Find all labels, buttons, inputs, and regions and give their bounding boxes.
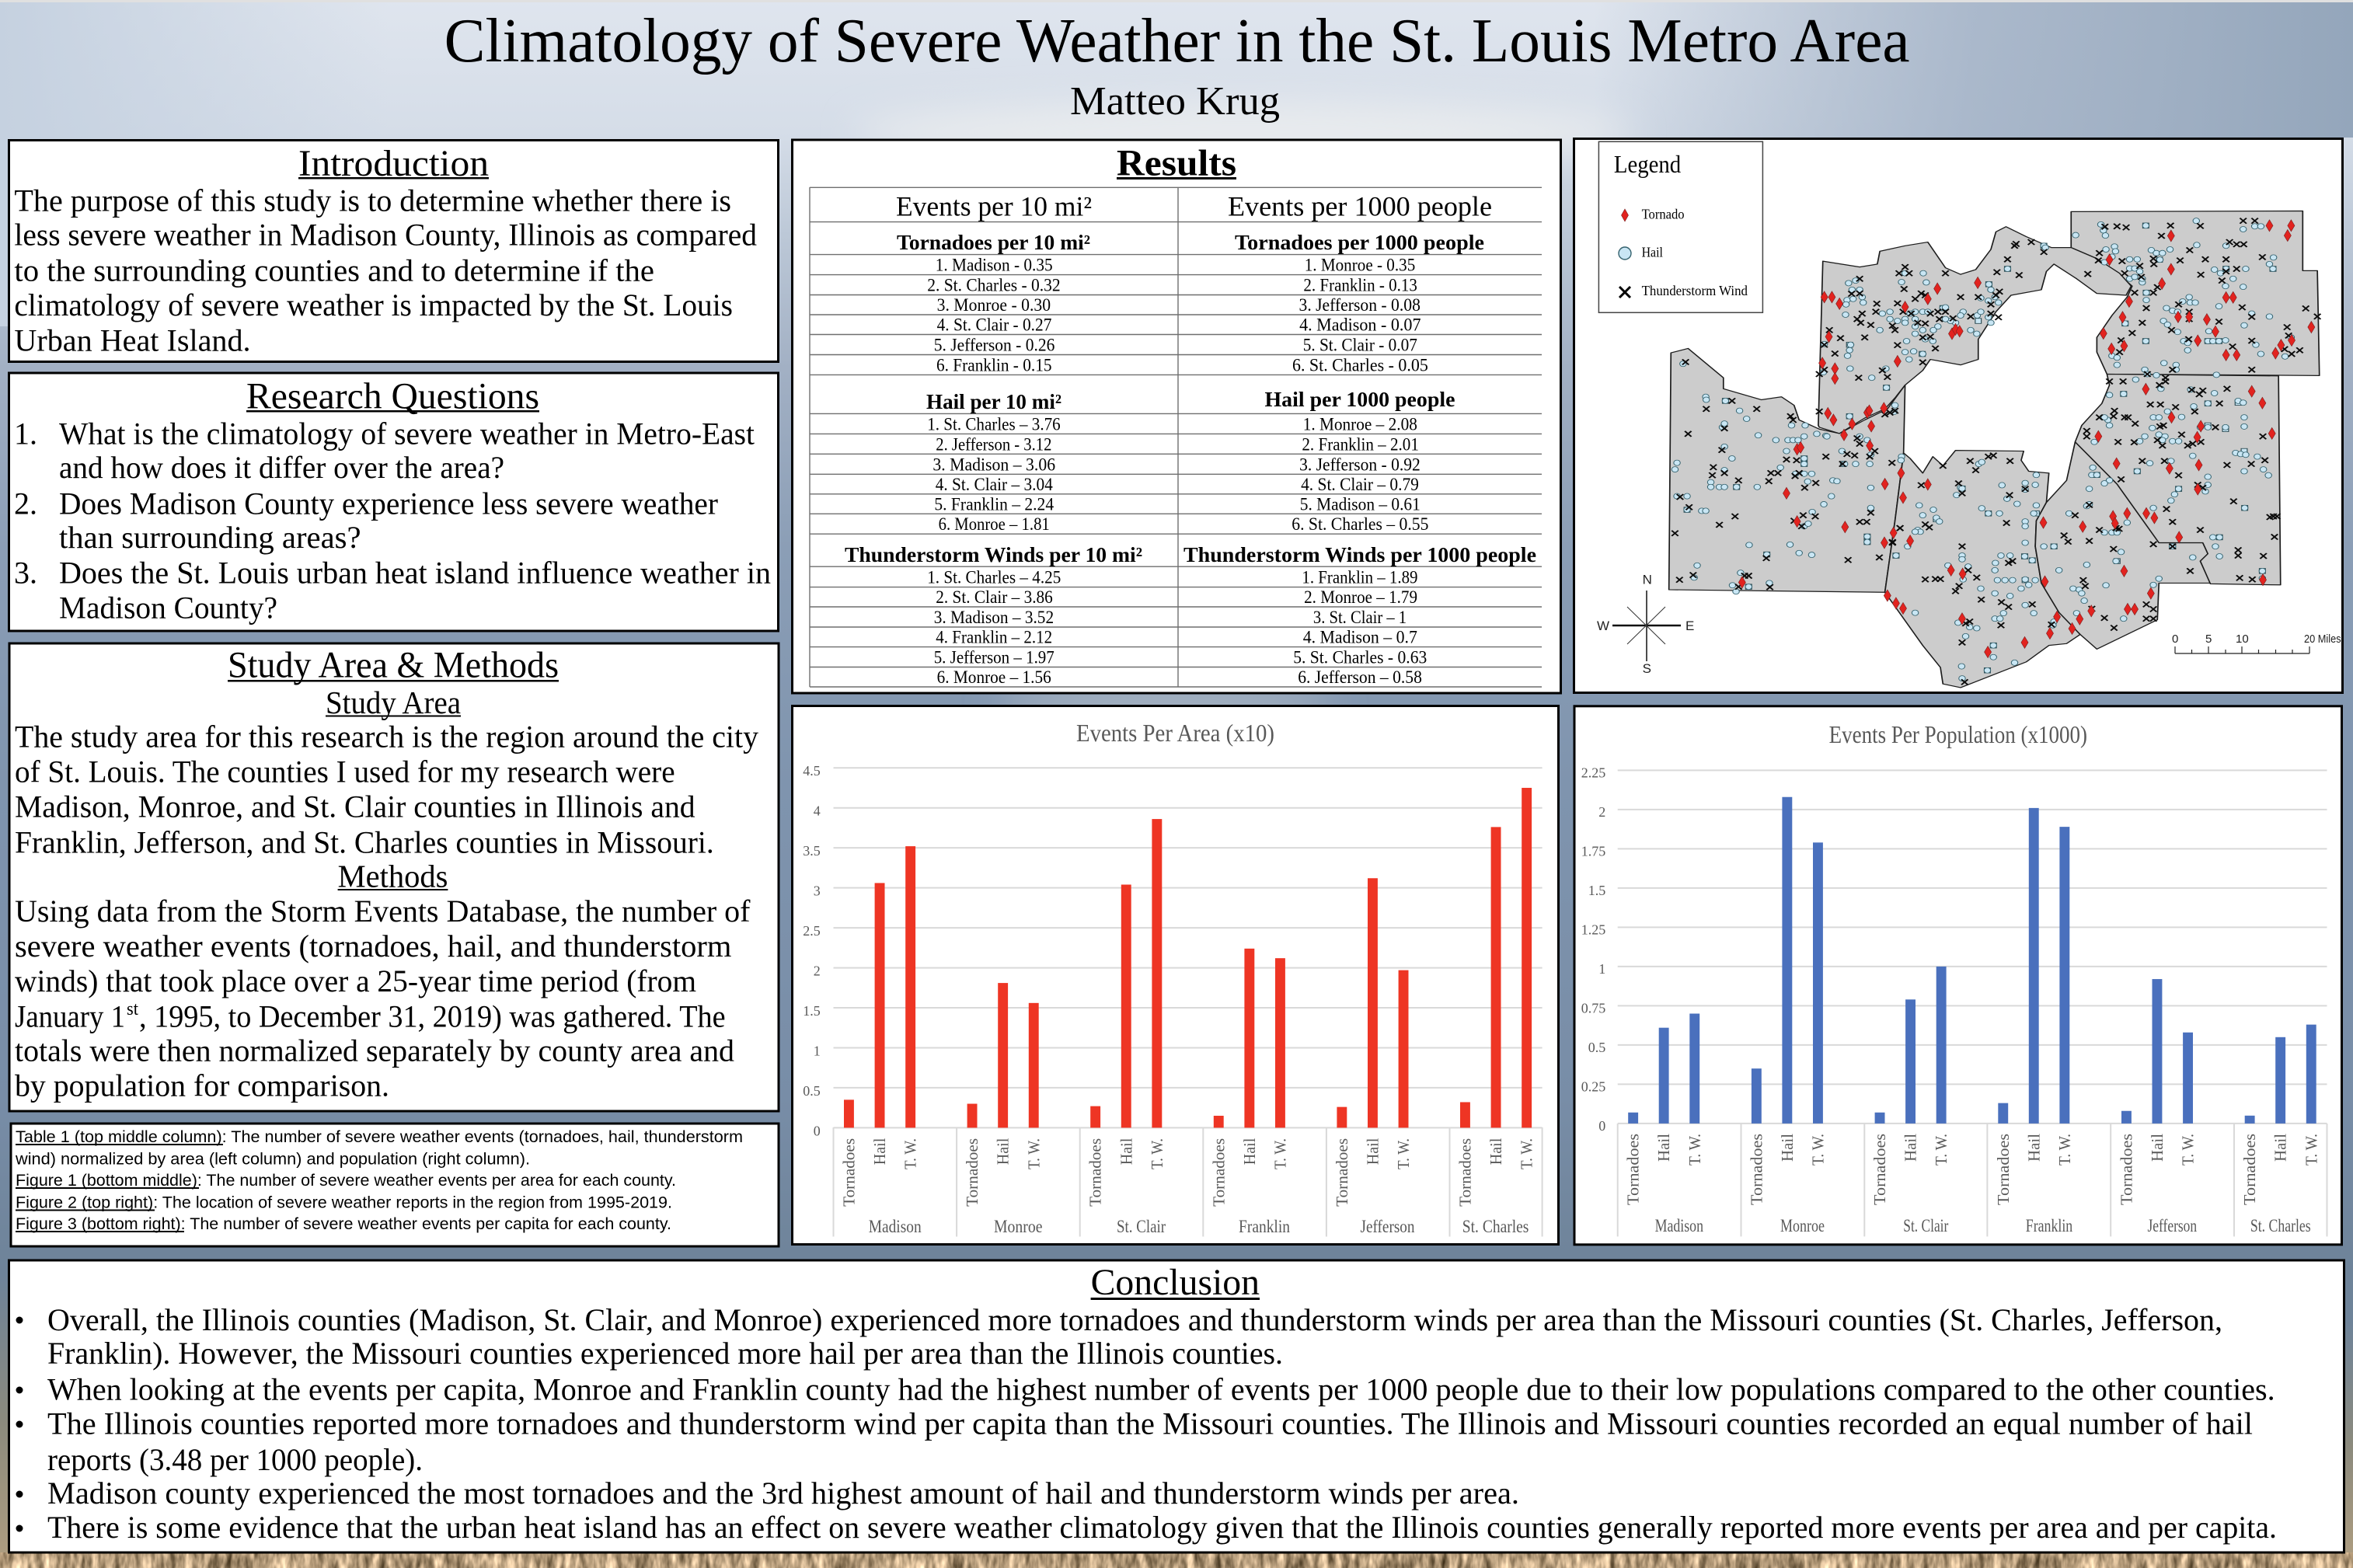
panel: research questions bbox=[9, 373, 779, 631]
county labels: Jefferson bbox=[1360, 1217, 1415, 1236]
rotated category labels: Hail bbox=[1117, 1138, 1135, 1165]
rotated category labels: Hail bbox=[2271, 1134, 2290, 1162]
table section: tornadoes per population: 5. St. Clair - 0.07 bbox=[1303, 336, 1417, 354]
rotated category labels: Tornadoes bbox=[2117, 1134, 2135, 1205]
y axis labels: 3.5 bbox=[803, 843, 821, 859]
subheading: methods: Methods bbox=[338, 858, 448, 894]
text: methods body: winds) that took place over a 25-year time period (from bbox=[15, 963, 696, 998]
text: study area body bbox=[15, 720, 758, 860]
rotated category labels: T. W. bbox=[1518, 1138, 1536, 1169]
rotated category labels: Tornadoes bbox=[1747, 1134, 1766, 1205]
rotated category labels: T. W. bbox=[2302, 1134, 2320, 1166]
panel: figure captions bbox=[11, 1124, 779, 1246]
table section: tornadoes per area: 6. Franklin - 0.15 bbox=[936, 355, 1052, 375]
table section: tornadoes per population: 2. Franklin - 0.13 bbox=[1303, 275, 1417, 295]
county labels bbox=[869, 1217, 1529, 1236]
map scale bar: 0 bbox=[2172, 632, 2178, 646]
table section: tornadoes per area: 1. Madison - 0.35 bbox=[936, 255, 1053, 275]
text: methods body: totals were then normalized separately by county area and bbox=[15, 1033, 734, 1068]
text: methods body bbox=[15, 894, 751, 1103]
rotated category labels: Tornadoes bbox=[839, 1138, 858, 1207]
table section: thunderstorm winds per area bbox=[845, 543, 1142, 687]
county labels: Franklin bbox=[1239, 1217, 1290, 1236]
table section: thunderstorm winds per area: 3. Madison – 3.52 bbox=[934, 608, 1054, 627]
map legend: Hail bbox=[1642, 244, 1663, 260]
table section: thunderstorm winds per population: 4. Madison – 0.7 bbox=[1303, 628, 1417, 647]
y axis labels: 1.75 bbox=[1581, 843, 1605, 859]
table section: tornadoes per population: 3. Jefferson - 0.08 bbox=[1299, 295, 1421, 315]
text: methods body: st bbox=[127, 999, 138, 1019]
map: county polygons and event markers bbox=[1669, 211, 2320, 688]
map scale bar: 20 Miles bbox=[2304, 632, 2341, 646]
panel: conclusion bbox=[9, 1260, 2344, 1552]
y axis labels: 3 bbox=[814, 883, 821, 898]
table section: hail per area: 2. Jefferson - 3.12 bbox=[936, 434, 1051, 454]
rotated category labels: Hail bbox=[2024, 1134, 2043, 1162]
rotated category labels: Tornadoes bbox=[2240, 1134, 2259, 1205]
county labels: Jefferson bbox=[2148, 1216, 2197, 1235]
bullet list: conclusions: There is some evidence that the urban heat island has an effect on severe weather climatology given that the Illinois counties generally reported more events per area and per capita. bbox=[47, 1510, 2277, 1545]
icon: north arrow compass bbox=[1597, 572, 1694, 676]
map legend: Tornado bbox=[1642, 206, 1685, 221]
map legend bbox=[1598, 141, 1762, 312]
map legend: Legend bbox=[1614, 150, 1681, 178]
text: study area body: of St. Louis. The counties I used for my research were bbox=[15, 754, 675, 789]
bullet list: conclusions: Madison county experienced the most tornadoes and the 3rd highest amount of hail and thunderstorm winds per area. bbox=[47, 1476, 1519, 1511]
table grid lines bbox=[810, 187, 1542, 687]
rotated category labels: T. W. bbox=[1809, 1134, 1828, 1166]
y axis labels: 4.5 bbox=[803, 763, 821, 779]
list: research questions bbox=[14, 416, 771, 625]
rotated category labels: T. W. bbox=[901, 1138, 920, 1169]
table section: hail per area: 1. St. Charles – 3.76 bbox=[927, 414, 1061, 434]
list: research questions: 1. bbox=[14, 416, 37, 451]
table section: tornadoes per population: 6. St. Charles - 0.05 bbox=[1292, 355, 1428, 375]
author: Matteo Krug bbox=[1070, 79, 1280, 124]
y axis labels: 0 bbox=[814, 1123, 821, 1138]
list: research questions: Does the St. Louis urban heat island influence weather in bbox=[59, 556, 771, 591]
rotated category labels: Hail bbox=[1654, 1134, 1673, 1162]
bullet list: conclusions: The Illinois counties reported more tornadoes and thunderstorm wind per capita than the Missouri counties. The Illinois and Missouri counties recorded an equal number of hail bbox=[47, 1406, 2253, 1441]
rotated category labels: Hail bbox=[1487, 1138, 1505, 1165]
panel: introduction bbox=[9, 140, 779, 362]
table section: hail per population: 2. Franklin – 2.01 bbox=[1302, 434, 1419, 454]
y axis labels: 0 bbox=[1598, 1118, 1605, 1134]
table column headers: Events per 10 mi² bbox=[896, 191, 1092, 222]
table section: tornadoes per population bbox=[1235, 231, 1484, 375]
icon: north arrow compass: N bbox=[1643, 572, 1652, 587]
table section: thunderstorm winds per population: 2. Monroe – 1.79 bbox=[1304, 587, 1417, 607]
icon: north arrow compass: E bbox=[1685, 618, 1694, 633]
table section: tornadoes per area bbox=[897, 231, 1090, 375]
rotated category labels: Hail bbox=[1363, 1138, 1382, 1165]
county labels: Madison bbox=[1655, 1216, 1703, 1235]
table section: hail per population: Hail per 1000 people bbox=[1265, 388, 1455, 411]
table section: hail per population: 5. Madison – 0.61 bbox=[1300, 494, 1421, 514]
county labels: Monroe bbox=[994, 1217, 1043, 1236]
table section: thunderstorm winds per area: 2. St. Clair – 3.86 bbox=[936, 587, 1053, 607]
rotated category labels: T. W. bbox=[2055, 1134, 2074, 1166]
y axis labels: 4 bbox=[814, 803, 821, 819]
table section: hail per population: 6. St. Charles – 0.55 bbox=[1292, 514, 1428, 534]
text: introduction body: Urban Heat Island. bbox=[14, 323, 251, 358]
county labels: St. Charles bbox=[1462, 1217, 1529, 1236]
bullet list: conclusions: reports (3.48 per 1000 people). bbox=[47, 1442, 423, 1477]
text: methods body: Using data from the Storm Events Database, the number of bbox=[15, 894, 751, 929]
county labels: St. Charles bbox=[2250, 1216, 2311, 1235]
y axis labels: 1.25 bbox=[1581, 922, 1605, 937]
county labels: St. Clair bbox=[1117, 1217, 1166, 1236]
map scale bar bbox=[2172, 632, 2341, 653]
rotated category labels: T. W. bbox=[1685, 1134, 1704, 1166]
icon: north arrow compass: S bbox=[1643, 661, 1651, 676]
rotated category labels bbox=[1624, 1134, 2320, 1205]
y axis labels bbox=[1581, 765, 1605, 1134]
table section: thunderstorm winds per population: 5. St. Charles - 0.63 bbox=[1293, 648, 1427, 667]
table section: tornadoes per area: 2. St. Charles - 0.32 bbox=[927, 275, 1061, 295]
list: research questions: Does Madison County experience less severe weather bbox=[59, 486, 718, 521]
table section: thunderstorm winds per population: 1. Franklin – 1.89 bbox=[1302, 568, 1417, 587]
table section: hail per area: 6. Monroe – 1.81 bbox=[939, 514, 1050, 534]
table section: thunderstorm winds per area: 4. Franklin – 2.12 bbox=[936, 628, 1052, 647]
title: Climatology of Severe Weather in the St. Louis Metro Area bbox=[444, 7, 1910, 75]
y axis labels: 0.5 bbox=[1588, 1040, 1605, 1055]
heading: research questions: Research Questions bbox=[246, 376, 539, 417]
table column headers bbox=[896, 191, 1492, 222]
y axis labels: 2 bbox=[1598, 804, 1605, 820]
panel: events per area bar chart bbox=[793, 706, 1559, 1245]
table section: tornadoes per population: 4. Madison - 0.07 bbox=[1299, 315, 1421, 334]
list: research questions: What is the climatology of severe weather in Metro-East bbox=[59, 416, 755, 451]
rotated category labels: Hail bbox=[1240, 1138, 1259, 1165]
heading: study area and methods: Study Area & Methods bbox=[228, 644, 559, 685]
chart title: Events Per Population (x1000) bbox=[1829, 720, 2087, 748]
heading: conclusion: Conclusion bbox=[1091, 1262, 1260, 1303]
y axis labels: 1.5 bbox=[803, 1003, 821, 1019]
table section: hail per area bbox=[926, 390, 1061, 534]
table section: hail per area: 5. Franklin – 2.24 bbox=[934, 494, 1054, 514]
rotated category labels: T. W. bbox=[2179, 1134, 2198, 1166]
text: methods body: severe weather events (tornadoes, hail, and thunderstorm bbox=[15, 929, 731, 963]
table section: thunderstorm winds per area: 1. St. Charles – 4.25 bbox=[927, 568, 1061, 587]
table section: thunderstorm winds per population bbox=[1183, 543, 1536, 687]
rotated category labels: Tornadoes bbox=[1456, 1138, 1475, 1207]
text: introduction body: to the surrounding counties and to determine if the bbox=[14, 253, 654, 288]
panel: map of severe weather reports bbox=[1574, 138, 2342, 693]
heading: results: Results bbox=[1117, 143, 1236, 184]
rotated category labels: Tornadoes bbox=[1333, 1138, 1351, 1207]
list: research questions: and how does it differ over the area? bbox=[59, 450, 504, 485]
panel: study area and methods bbox=[9, 643, 779, 1111]
list: research questions: 2. bbox=[14, 486, 37, 521]
table section: hail per population bbox=[1265, 388, 1455, 534]
table section: hail per population: 1. Monroe – 2.08 bbox=[1303, 414, 1417, 434]
text: introduction body: less severe weather in Madison County, Illinois as compared bbox=[14, 218, 757, 252]
y axis labels: 0.5 bbox=[803, 1083, 821, 1099]
blue bars bbox=[1628, 797, 2316, 1124]
panel: events per population bar chart bbox=[1574, 706, 2342, 1245]
panel: figure captions: Figure 2 (top right): The location of severe weather reports in the region from 1995-2019. bbox=[16, 1193, 672, 1212]
county labels: Madison bbox=[869, 1217, 922, 1236]
y axis labels: 2.5 bbox=[803, 923, 821, 939]
rotated category labels: Tornadoes bbox=[963, 1138, 981, 1207]
map scale bar: 10 bbox=[2236, 632, 2249, 646]
table section: tornadoes per population: 1. Monroe - 0.35 bbox=[1305, 255, 1415, 275]
y axis labels: 1 bbox=[814, 1043, 821, 1058]
y axis labels: 1 bbox=[1598, 961, 1605, 977]
subheading: study area: Study Area bbox=[326, 685, 461, 720]
table section: tornadoes per area: Tornadoes per 10 mi² bbox=[897, 231, 1090, 254]
list: research questions: 3. bbox=[14, 556, 37, 591]
rotated category labels: Tornadoes bbox=[1086, 1138, 1105, 1207]
rotated category labels: Tornadoes bbox=[1870, 1134, 1889, 1205]
bullet list: conclusions bbox=[16, 1302, 2277, 1545]
rotated category labels: T. W. bbox=[1024, 1138, 1043, 1169]
list: research questions: Madison County? bbox=[59, 591, 277, 625]
bullet list: conclusions: Overall, the Illinois counties (Madison, St. Clair, and Monroe) experienced more tornadoes and thunderstorm winds per area than the Missouri counties (St. Charles, Jefferson, bbox=[47, 1302, 2222, 1337]
table section: tornadoes per area: 3. Monroe - 0.30 bbox=[937, 295, 1051, 315]
text: introduction body bbox=[14, 183, 757, 358]
panel: figure captions: Table 1 (top middle column): The number of severe weather events (tornadoes, hail, thunderstorm bbox=[16, 1128, 743, 1146]
table section: thunderstorm winds per population: 3. St. Clair – 1 bbox=[1313, 608, 1407, 627]
y axis labels: 1.5 bbox=[1588, 883, 1605, 898]
rotated category labels: T. W. bbox=[1394, 1138, 1413, 1169]
table section: thunderstorm winds per population: Thunderstorm Winds per 1000 people bbox=[1183, 543, 1536, 566]
table section: thunderstorm winds per area: 5. Jefferson – 1.97 bbox=[934, 648, 1054, 667]
table section: hail per population: 4. St. Clair – 0.79 bbox=[1301, 475, 1419, 494]
map legend: Thunderstorm Wind bbox=[1642, 283, 1748, 298]
bullet list: conclusions: Franklin). However, the Missouri counties experienced more hail per area than the Illinois counties. bbox=[47, 1336, 1283, 1371]
text: study area body: The study area for this research is the region around the city bbox=[15, 720, 758, 754]
rotated category labels: Tornadoes bbox=[1994, 1134, 2013, 1205]
table section: tornadoes per area: 4. St. Clair - 0.27 bbox=[937, 315, 1051, 334]
panel: figure captions: Figure 1 (bottom middle): The number of severe weather events per area for each county. bbox=[16, 1172, 676, 1190]
table section: hail per area: 3. Madison – 3.06 bbox=[932, 455, 1055, 474]
table section: thunderstorm winds per area: 6. Monroe – 1.56 bbox=[937, 667, 1051, 687]
table section: thunderstorm winds per population: 6. Jefferson – 0.58 bbox=[1298, 667, 1422, 687]
map scale bar: 5 bbox=[2205, 632, 2212, 646]
text: methods body: by population for comparison. bbox=[15, 1068, 389, 1103]
panel: results table bbox=[793, 140, 1560, 693]
list: research questions: than surrounding areas? bbox=[59, 520, 361, 555]
rotated category labels bbox=[839, 1138, 1536, 1207]
rotated category labels: Hail bbox=[1902, 1134, 1920, 1162]
text: methods body: January 1 bbox=[15, 998, 125, 1033]
rotated category labels: Hail bbox=[2148, 1134, 2167, 1162]
red bars bbox=[844, 788, 1532, 1127]
table section: hail per area: 4. St. Clair – 3.04 bbox=[936, 475, 1053, 494]
y axis labels: 0.25 bbox=[1581, 1078, 1605, 1094]
county labels: St. Clair bbox=[1903, 1216, 1949, 1235]
rotated category labels: T. W. bbox=[1271, 1138, 1290, 1169]
y axis labels: 2.25 bbox=[1581, 765, 1605, 780]
county labels: Franklin bbox=[2026, 1216, 2073, 1235]
rotated category labels: Tornadoes bbox=[1209, 1138, 1228, 1207]
rotated category labels: Hail bbox=[994, 1138, 1013, 1165]
text: introduction body: climatology of severe weather is impacted by the St. Louis bbox=[14, 287, 733, 322]
table column headers: Events per 1000 people bbox=[1228, 191, 1492, 222]
table section: tornadoes per population: Tornadoes per 1000 people bbox=[1235, 231, 1484, 254]
rotated category labels: T. W. bbox=[1932, 1134, 1950, 1166]
rotated category labels: Hail bbox=[870, 1138, 889, 1165]
chart title: Events Per Area (x10) bbox=[1076, 719, 1274, 747]
rotated category labels: Tornadoes bbox=[1624, 1134, 1643, 1205]
bullet list: conclusions: When looking at the events per capita, Monroe and Franklin county had the highest number of events per 1000 people due to their low populations compared to the other counties. bbox=[47, 1372, 2275, 1407]
table section: thunderstorm winds per area: Thunderstorm Winds per 10 mi² bbox=[845, 543, 1142, 566]
heading: introduction: Introduction bbox=[298, 143, 489, 184]
y axis labels: 2 bbox=[814, 963, 821, 979]
text: methods body: , 1995, to December 31, 2019) was gathered. The bbox=[139, 998, 726, 1033]
text: study area body: Franklin, Jefferson, and St. Charles counties in Missouri. bbox=[15, 825, 714, 860]
panel: figure captions: Figure 3 (bottom right): The number of severe weather events per capita for each county. bbox=[16, 1215, 671, 1233]
panel: figure captions: wind) normalized by area (left column) and population (right column). bbox=[15, 1150, 530, 1169]
y axis labels: 0.75 bbox=[1581, 1000, 1605, 1016]
y axis labels bbox=[803, 763, 821, 1138]
text: introduction body: The purpose of this study is to determine whether there is bbox=[14, 183, 731, 218]
rotated category labels: Hail bbox=[1778, 1134, 1797, 1162]
icon: north arrow compass: W bbox=[1597, 618, 1609, 633]
county labels bbox=[1655, 1216, 2311, 1235]
county labels: Monroe bbox=[1780, 1216, 1825, 1235]
table section: tornadoes per area: 5. Jefferson - 0.26 bbox=[934, 336, 1054, 354]
text: study area body: Madison, Monroe, and St. Clair counties in Illinois and bbox=[15, 789, 695, 824]
table section: hail per population: 3. Jefferson - 0.92 bbox=[1299, 455, 1421, 474]
rotated category labels: T. W. bbox=[1148, 1138, 1166, 1169]
table section: hail per area: Hail per 10 mi² bbox=[926, 390, 1061, 413]
